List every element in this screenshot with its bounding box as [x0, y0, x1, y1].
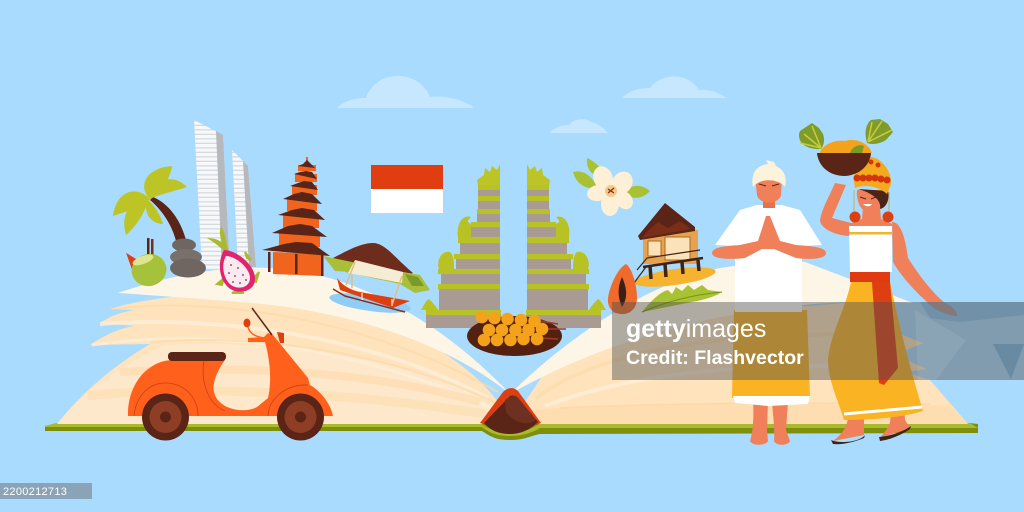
watermark credit text: Credit: Flashvector — [626, 347, 804, 369]
cloud large — [337, 76, 474, 108]
book cover — [45, 423, 978, 440]
top page left — [118, 268, 510, 394]
man's shirt — [715, 205, 822, 312]
palm tree — [113, 166, 187, 241]
man's sarong — [732, 310, 810, 398]
man's head — [755, 178, 782, 202]
scooter seat — [168, 352, 226, 361]
palm leaf — [642, 285, 722, 312]
man's legs — [750, 402, 790, 445]
man's turban — [752, 160, 786, 187]
scooter — [128, 308, 333, 440]
stilt hut — [633, 203, 717, 291]
woman's legs — [833, 385, 910, 441]
image id label — [0, 483, 92, 499]
cloud medium — [622, 77, 726, 98]
satay plate — [467, 311, 566, 356]
woman's waist sash — [850, 272, 890, 282]
boat sail — [348, 260, 403, 283]
mountain and boat — [323, 243, 430, 317]
boat hull — [337, 278, 410, 308]
woman's skirt — [828, 282, 923, 420]
image id label: 2200212713 — [3, 486, 67, 498]
right pages stack — [510, 300, 968, 424]
stacked stones — [170, 238, 206, 278]
papaya — [608, 264, 637, 314]
woman's flower earrings — [850, 190, 894, 222]
left pages stack — [57, 293, 510, 424]
fruit basket — [799, 119, 893, 176]
coconut drink — [127, 238, 170, 290]
scooter front wheel — [277, 394, 324, 440]
dragon fruit — [206, 226, 259, 293]
woman's headdress — [854, 157, 891, 194]
spine — [480, 388, 541, 434]
man's arms and hands — [712, 216, 826, 259]
watermark band — [612, 302, 1024, 380]
skyscrapers — [194, 120, 256, 270]
woman's top — [849, 226, 892, 272]
woman's head — [857, 190, 884, 212]
right half of gate — [526, 164, 606, 328]
open book — [45, 261, 978, 440]
scooter rear wheel — [142, 394, 189, 440]
boat water — [328, 289, 412, 317]
temple gate — [421, 164, 606, 328]
woman in traditional dress — [799, 119, 957, 444]
page lines — [88, 306, 930, 414]
woman's neck and chest — [849, 208, 892, 230]
flag of Indonesia — [371, 165, 443, 213]
scooter mirror — [244, 308, 284, 343]
cloud small — [550, 119, 608, 133]
man's neck — [763, 200, 775, 208]
woman's hanging sash — [872, 282, 898, 385]
scooter body — [128, 333, 333, 416]
man in traditional dress — [712, 160, 826, 445]
watermark logo text: gettyimages — [626, 315, 766, 343]
pagoda — [262, 157, 330, 276]
top page right — [510, 261, 913, 394]
left half of gate — [421, 164, 501, 328]
woman's arms — [820, 183, 851, 236]
woman's sandals — [831, 426, 911, 444]
plumeria flower — [573, 158, 650, 216]
